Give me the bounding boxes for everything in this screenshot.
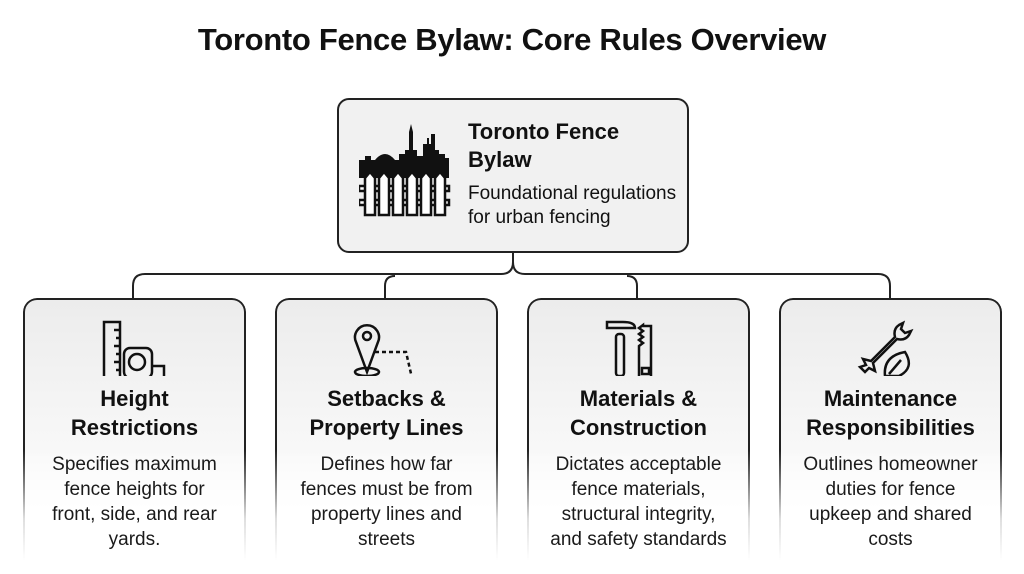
text: Height bbox=[100, 386, 169, 411]
text: streets bbox=[358, 529, 415, 550]
text: Outlines homeowner bbox=[803, 454, 978, 475]
icon: location pin with dashed lot bbox=[354, 324, 412, 376]
text: Setbacks & bbox=[327, 386, 446, 411]
heading: Bylaw bbox=[468, 147, 532, 172]
panel: height restrictions bbox=[52, 320, 217, 550]
panel: maintenance bbox=[803, 320, 978, 550]
text: and safety standards bbox=[550, 529, 727, 550]
text: fences must be from bbox=[300, 479, 473, 500]
panel: setbacks bbox=[300, 324, 473, 550]
center box: Toronto Fence Bylaw bbox=[337, 98, 689, 253]
text: Property Lines bbox=[309, 415, 464, 440]
description: for urban fencing bbox=[468, 207, 611, 228]
icon: ruler and tape bbox=[102, 320, 166, 376]
text: fence heights for bbox=[64, 479, 205, 500]
description: Foundational regulations bbox=[468, 183, 676, 204]
text: front, side, and rear bbox=[52, 504, 217, 525]
text: costs bbox=[868, 529, 913, 550]
text: Construction bbox=[570, 415, 707, 440]
text: Responsibilities bbox=[806, 415, 975, 440]
text: upkeep and shared bbox=[809, 504, 972, 525]
icon: skyline and fence bbox=[359, 124, 450, 216]
text: fence materials, bbox=[571, 479, 706, 500]
text: Specifies maximum bbox=[52, 454, 217, 475]
text: property lines and bbox=[311, 504, 462, 525]
text: Materials & bbox=[580, 386, 697, 411]
icon: wrench and leaf bbox=[858, 320, 914, 376]
icon: hammer and saw bbox=[606, 320, 652, 376]
description bbox=[468, 183, 676, 228]
heading bbox=[468, 119, 619, 172]
text: Maintenance bbox=[824, 386, 957, 411]
text: Dictates acceptable bbox=[556, 454, 721, 475]
text: Defines how far bbox=[320, 454, 452, 475]
panel: materials bbox=[550, 320, 727, 550]
text: duties for fence bbox=[826, 479, 955, 500]
text: structural integrity, bbox=[562, 504, 715, 525]
title: Toronto Fence Bylaw: Core Rules Overview bbox=[198, 22, 826, 57]
text: Restrictions bbox=[71, 415, 198, 440]
heading: Toronto Fence bbox=[468, 119, 619, 144]
text: yards. bbox=[109, 529, 160, 550]
